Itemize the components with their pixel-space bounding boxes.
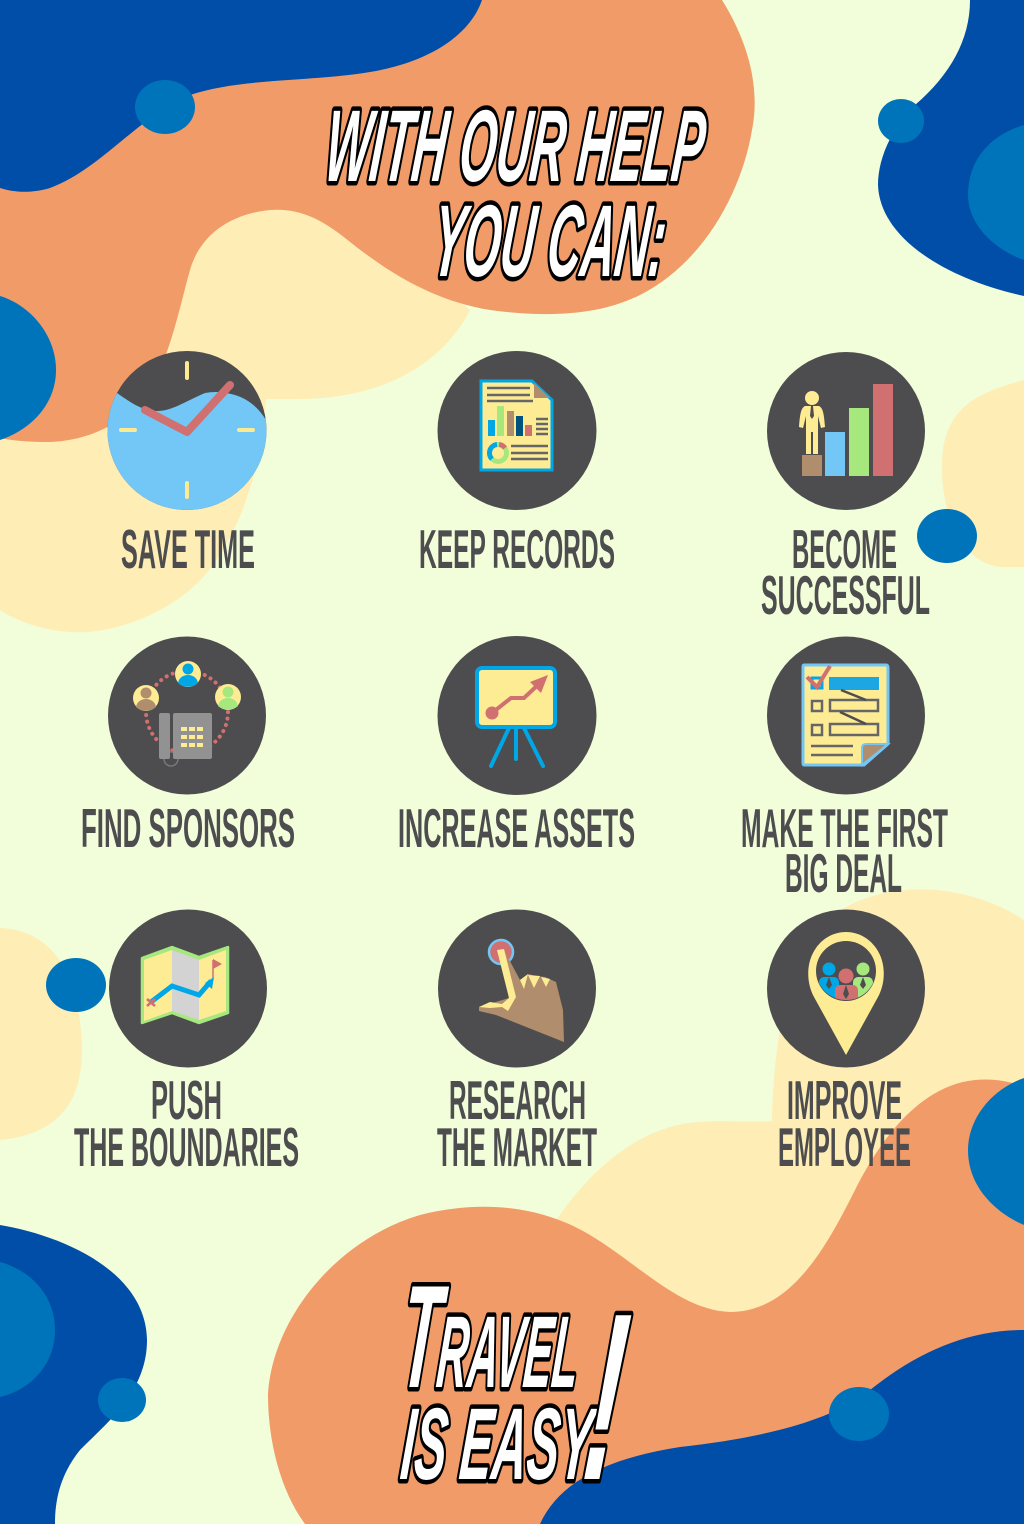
text: THE BOUNDARIES — [74, 1116, 299, 1178]
text: THE MARKET — [437, 1116, 597, 1178]
icon: phone and sponsors — [108, 636, 266, 794]
icon: report document — [438, 351, 596, 510]
text: FIND SPONSORS — [81, 797, 295, 859]
icon: clock — [108, 351, 266, 510]
icon: map — [109, 910, 267, 1068]
background: bottom-right blobs — [268, 889, 1024, 1524]
closing slogan: T — [395, 1255, 452, 1418]
title: YOU CAN: — [428, 183, 672, 298]
icon: success bars — [767, 352, 925, 510]
text: RESEARCH — [449, 1069, 586, 1131]
background: left blob — [0, 928, 106, 1140]
background: bottom-left blobs — [0, 1225, 147, 1524]
title — [321, 88, 711, 298]
label: research the market — [437, 1069, 597, 1178]
text: INCREASE ASSETS — [398, 797, 635, 859]
background: right blob — [917, 380, 1024, 567]
label: make the first big deal — [741, 797, 948, 904]
icon: location pin with people — [767, 910, 925, 1068]
closing slogan — [395, 1255, 639, 1524]
closing slogan: RAVEL — [433, 1294, 584, 1409]
background: top-left blobs — [0, 0, 755, 632]
background: top-right blobs — [878, 0, 1024, 296]
label: push the boundaries: PUSH — [151, 1069, 222, 1131]
closing slogan: IS EASY — [397, 1386, 601, 1501]
text: SAVE TIME — [121, 518, 255, 580]
icon: pointing hand — [438, 910, 596, 1068]
label: push the boundaries — [74, 1069, 299, 1178]
label: improve employee — [778, 1069, 911, 1178]
icon: checklist — [767, 636, 925, 794]
label: become successful — [761, 518, 930, 626]
text: KEEP RECORDS — [419, 518, 615, 580]
icon: presentation board — [438, 636, 596, 795]
closing slogan: ! — [575, 1264, 639, 1524]
